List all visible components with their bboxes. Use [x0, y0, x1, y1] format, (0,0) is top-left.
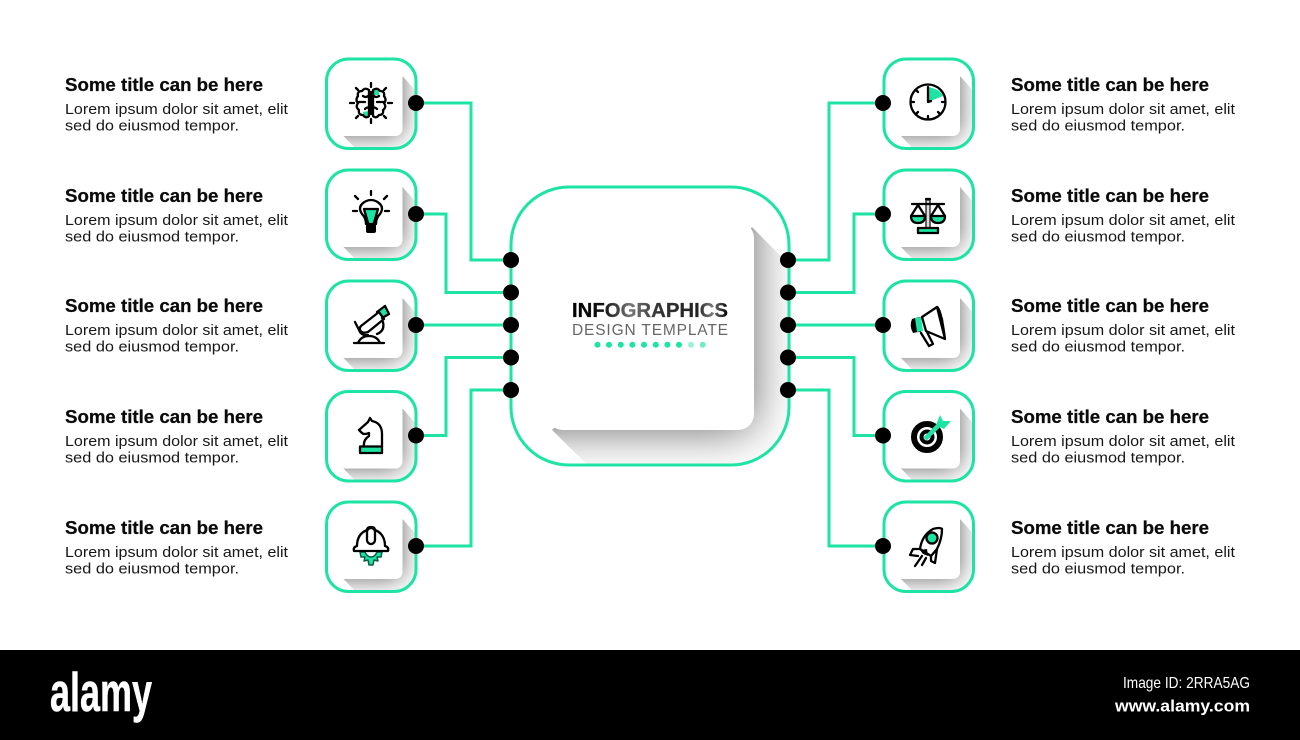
- title: Some title can be here: [1011, 406, 1209, 427]
- website: www.alamy.com: [1114, 696, 1250, 716]
- icon: rocket: [910, 528, 942, 566]
- title: Some title can be here: [1011, 517, 1209, 538]
- description: sed do eiusmod tempor.: [1011, 450, 1185, 466]
- panel: center card: [510, 186, 790, 466]
- description: Lorem ipsum dolor sit amet, elit: [65, 544, 289, 561]
- connector dot: [408, 538, 424, 554]
- description: Lorem ipsum dolor sit amet, elit: [65, 101, 289, 118]
- description: Lorem ipsum dolor sit amet, elit: [65, 322, 289, 339]
- description: sed do eiusmod tempor.: [65, 118, 239, 134]
- title: Some title can be here: [1011, 185, 1209, 206]
- description: sed do eiusmod tempor.: [65, 560, 239, 578]
- title: Some title can be here: [65, 185, 263, 206]
- connector dot: [408, 428, 424, 444]
- title: Some title can be here: [65, 74, 263, 95]
- center heading: INFOGRAPHICS: [572, 300, 728, 322]
- description: [65, 322, 289, 356]
- description: [65, 212, 289, 246]
- description: sed do eiusmod tempor.: [1011, 338, 1185, 356]
- description: [65, 433, 289, 466]
- icon: megaphone: [911, 307, 945, 346]
- connector dot: [875, 317, 891, 333]
- icon: helmet and gear: [354, 527, 388, 565]
- description: [65, 101, 289, 134]
- panel: left item 2: [65, 110, 424, 260]
- description: [1011, 101, 1236, 134]
- description: sed do eiusmod tempor.: [65, 450, 239, 466]
- description: Lorem ipsum dolor sit amet, elit: [1011, 212, 1236, 229]
- center connector dots: [503, 252, 796, 398]
- connector dot: [875, 95, 891, 111]
- description: [1011, 322, 1236, 356]
- title: Some title can be here: [1011, 74, 1209, 95]
- image id: Image ID: 2RRA5AG: [1123, 675, 1250, 692]
- title: Some title can be here: [65, 406, 263, 427]
- panel: left item 5: [65, 442, 424, 592]
- connector dot: [875, 538, 891, 554]
- title: Some title can be here: [1011, 295, 1209, 316]
- connector dot: [408, 95, 424, 111]
- description: Lorem ipsum dolor sit amet, elit: [1011, 322, 1236, 339]
- icon: brain: [350, 83, 392, 123]
- center dots: [594, 342, 706, 348]
- connector dot: [875, 206, 891, 222]
- panel: right item 4: [824, 332, 1236, 481]
- description: sed do eiusmod tempor.: [65, 228, 239, 246]
- connector dot: [408, 317, 424, 333]
- icon: light bulb: [353, 191, 389, 233]
- description: Lorem ipsum dolor sit amet, elit: [65, 212, 289, 229]
- panel: right item 3: [824, 221, 1236, 370]
- title: Some title can be here: [65, 517, 263, 538]
- description: Lorem ipsum dolor sit amet, elit: [65, 433, 289, 450]
- title: Some title can be here: [65, 295, 263, 316]
- description: sed do eiusmod tempor.: [1011, 560, 1185, 578]
- panel: right item 2: [824, 110, 1236, 260]
- description: Lorem ipsum dolor sit amet, elit: [1011, 433, 1236, 450]
- center outline: [511, 187, 789, 465]
- icon: chess knight: [359, 418, 382, 453]
- center card face: [547, 222, 754, 430]
- description: sed do eiusmod tempor.: [65, 338, 239, 356]
- footer bar: [0, 650, 1300, 740]
- description: [65, 544, 289, 578]
- connector dot: [875, 428, 891, 444]
- icon: target with arrow: [914, 415, 951, 450]
- footer logo: alamy: [50, 661, 152, 723]
- panel: right item 5: [824, 442, 1236, 592]
- panel: left item 3: [65, 221, 424, 370]
- description: Lorem ipsum dolor sit amet, elit: [1011, 101, 1236, 118]
- description: [1011, 212, 1236, 246]
- description: sed do eiusmod tempor.: [1011, 118, 1185, 134]
- panel: left item 4: [65, 332, 424, 481]
- icon: clock: [910, 84, 946, 120]
- center card shadow: [552, 227, 788, 464]
- description: [1011, 544, 1236, 578]
- icon: microscope: [354, 306, 389, 343]
- connector dot: [408, 206, 424, 222]
- description: [1011, 433, 1236, 466]
- center subheading: DESIGN TEMPLATE: [572, 322, 728, 339]
- panel: left item 1: [65, 0, 424, 148]
- description: sed do eiusmod tempor.: [1011, 228, 1185, 246]
- description: Lorem ipsum dolor sit amet, elit: [1011, 544, 1236, 561]
- icon: scales: [911, 199, 945, 233]
- connector lines: [416, 103, 883, 546]
- panel: right item 1: [824, 0, 1236, 148]
